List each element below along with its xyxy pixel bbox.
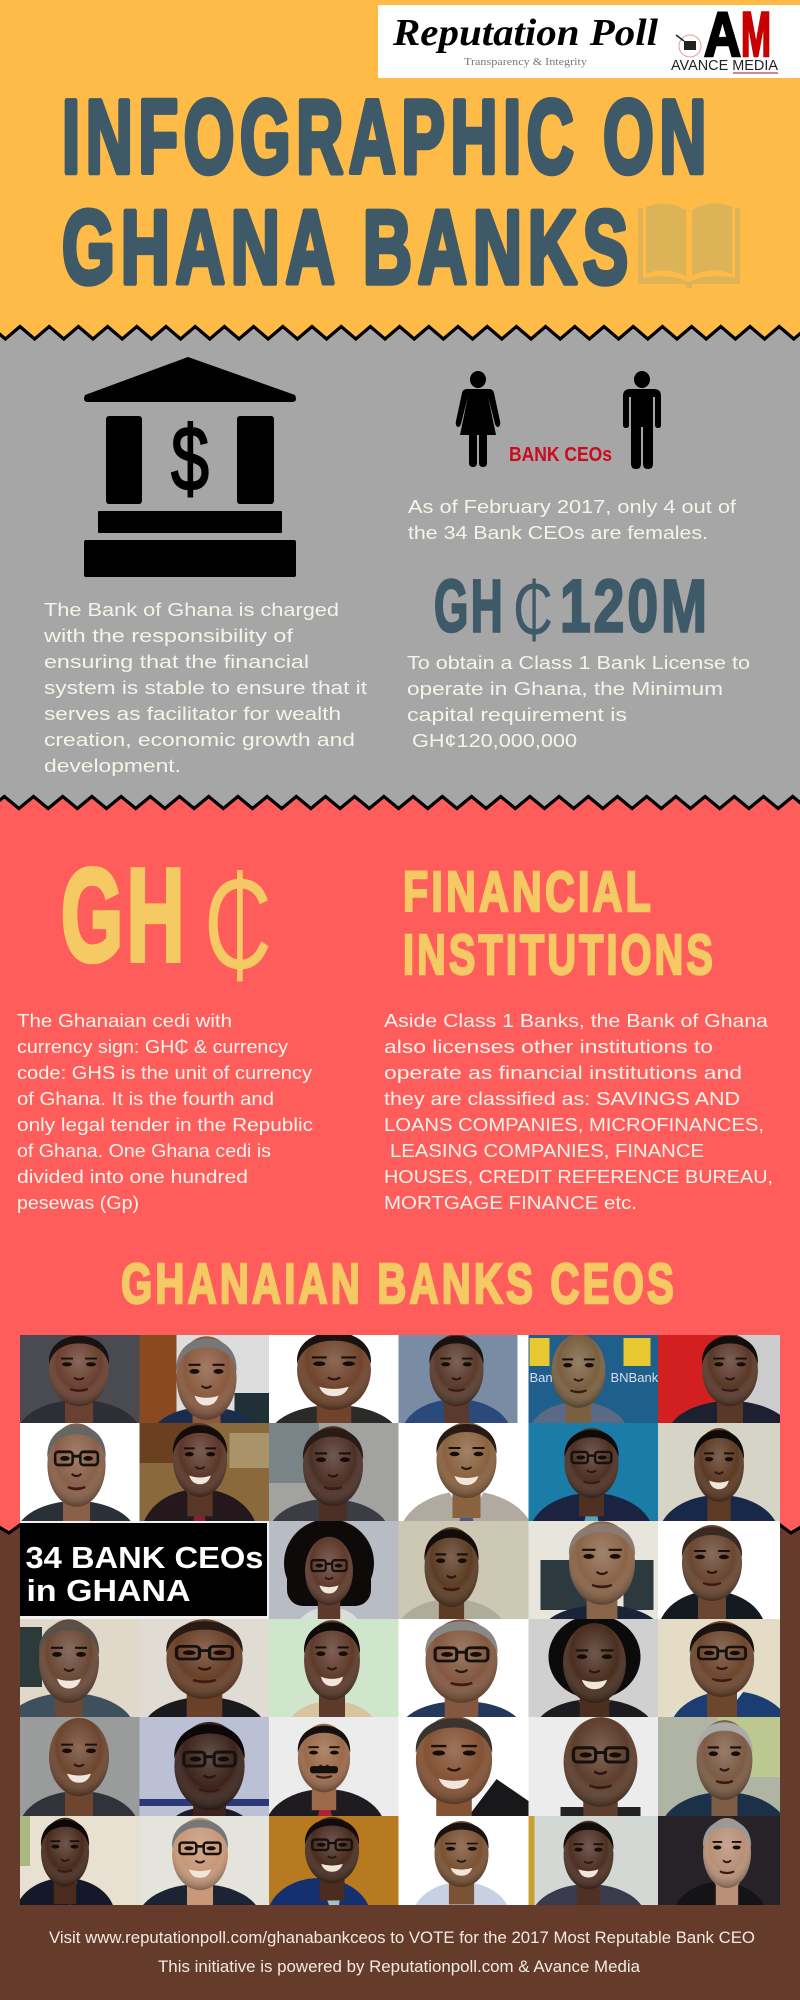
portrait 12 — [658, 1423, 780, 1521]
portrait 20 — [398, 1619, 528, 1717]
logo panel: Reputation Poll and Avance Media — [378, 0, 800, 78]
portrait 17 — [20, 1619, 140, 1717]
text: Ghanaian cedi description: divided into one hundred — [17, 1167, 248, 1187]
text: Bank of Ghana responsibility: system is stable to ensure that it — [44, 678, 367, 698]
heading: financial institutions — [403, 860, 716, 987]
portrait 28 — [658, 1717, 780, 1816]
portrait 32 — [398, 1816, 528, 1905]
text: Bank of Ghana responsibility — [43, 600, 367, 776]
text: other licensed institutions: HOUSES, CREDIT REFERENCE BUREAU, — [384, 1167, 773, 1187]
text: Ghanaian cedi description: only legal tender in the Republic — [17, 1115, 313, 1135]
portrait 25 — [269, 1717, 398, 1816]
text: Ghanaian cedi description: pesewas (Gp) — [17, 1193, 139, 1213]
portrait 7 — [20, 1423, 140, 1521]
footer text: initiative credit: This initiative is powered by Reputationpoll.com & Avance Media — [158, 1957, 641, 1976]
text: other licensed institutions: MORTGAGE FINANCE etc. — [384, 1193, 637, 1213]
logo tagline: Transparency & Integrity — [464, 56, 588, 68]
text: Ghanaian cedi description — [17, 1011, 313, 1213]
panel: brown photo and footer background — [0, 1522, 800, 2000]
icon: female figure — [456, 371, 500, 467]
logo: AM monogram: M — [741, 0, 771, 70]
text: female CEO statistic: As of February 2017, only 4 out of — [408, 497, 737, 517]
portrait 26 — [398, 1717, 528, 1816]
portrait 27 — [528, 1717, 658, 1816]
heading: GH₵ symbol: ₵ — [204, 853, 272, 996]
portrait 5: Ban — [530, 1370, 553, 1385]
portrait 29 — [20, 1816, 140, 1905]
portrait 4 — [398, 1335, 518, 1423]
portrait 6 — [658, 1335, 780, 1423]
portrait 10 — [398, 1423, 528, 1521]
text: Ghanaian cedi description: of Ghana. One Ghana cedi is — [17, 1141, 271, 1161]
text: Ghanaian cedi description: code: GHS is the unit of currency — [17, 1063, 312, 1083]
portrait 1 — [20, 1335, 140, 1423]
label: BANK CEOs: BANK CEOs — [509, 444, 612, 466]
panel: grey bank facts background — [0, 326, 800, 810]
text: Ghanaian cedi description: The Ghanaian cedi with — [17, 1011, 232, 1031]
text: Class 1 licence requirement: GH¢120,000,000 — [412, 731, 577, 751]
text: female CEO statistic — [408, 497, 737, 543]
portrait 33 — [528, 1816, 658, 1905]
portrait 3 — [269, 1335, 398, 1423]
title tile: 34 BANK CEOs in GHANA: 34 BANK CEOs — [26, 1540, 264, 1575]
portrait 8 — [140, 1423, 269, 1521]
big number: GH₵120M: 120M — [560, 564, 710, 648]
icon: open book — [638, 203, 740, 288]
portrait 19 — [269, 1619, 398, 1717]
title tile: 34 BANK CEOs in GHANA — [20, 1521, 269, 1619]
text: Bank of Ghana responsibility: The Bank of Ghana is charged — [44, 600, 339, 620]
portrait 9 — [269, 1423, 398, 1521]
footer text: vote call to action: Visit www.reputationpoll.com/ghanabankceos to VOTE for the 2017 Most Reputable Bank CEO — [49, 1928, 755, 1947]
title — [62, 80, 712, 306]
strip: white gap beside portrait 4 — [518, 1335, 528, 1423]
portrait 14 — [398, 1521, 528, 1619]
text: other licensed institutions: LOANS COMPANIES, MICROFINANCES, — [384, 1115, 764, 1135]
portrait 18 — [140, 1619, 269, 1717]
photo grid: CEO portraits — [3, 1330, 792, 1958]
icon: bank building — [84, 357, 296, 577]
text: Class 1 licence requirement: To obtain a Class 1 Bank License to — [407, 653, 750, 673]
logo text: Avance Media: AVANCE MEDIA — [671, 57, 778, 74]
text: Class 1 licence requirement: capital requirement is — [407, 705, 627, 725]
icon: camera badge — [676, 35, 701, 57]
text: other licensed institutions: Aside Class 1 Banks, the Bank of Ghana — [384, 1011, 769, 1031]
portrait 24 — [140, 1717, 269, 1816]
heading: financial institutions: FINANCIAL — [403, 860, 654, 924]
text: Class 1 licence requirement — [407, 653, 750, 751]
text: Bank of Ghana responsibility: creation, economic growth and — [44, 730, 355, 750]
text: other licensed institutions — [384, 1011, 773, 1213]
portrait 16 — [658, 1521, 780, 1619]
portrait 5 — [528, 1335, 659, 1423]
logo: AM monogram — [704, 0, 771, 70]
heading: GH₵ symbol: GH — [61, 842, 188, 988]
text: Ghanaian cedi description: of Ghana. It is the fourth and — [17, 1089, 274, 1109]
text: Bank of Ghana responsibility: ensuring that the financial — [44, 652, 309, 672]
text: Bank of Ghana responsibility: development. — [44, 756, 181, 776]
big number: GH₵120M: ₵ — [513, 570, 553, 650]
logo text: Reputation Poll: Reputation Poll — [392, 12, 658, 54]
portrait 23 — [20, 1717, 140, 1816]
panel: orange header background — [0, 0, 800, 345]
portrait 22 — [658, 1619, 780, 1717]
portrait 34 — [658, 1816, 780, 1905]
portrait 11 — [528, 1423, 658, 1521]
portrait 30 — [140, 1816, 269, 1905]
big number: GH₵120M: GH — [434, 564, 505, 648]
text: other licensed institutions: they are classified as: SAVINGS AND — [384, 1089, 740, 1109]
text: Class 1 licence requirement: operate in Ghana, the Minimum — [407, 679, 723, 699]
text: Ghanaian cedi description: currency sign: GH₵ & currency — [17, 1037, 288, 1057]
big number: GH₵120M — [434, 564, 710, 650]
portrait 15 — [528, 1521, 658, 1619]
icon: male figure — [623, 371, 661, 469]
text: Bank of Ghana responsibility: with the responsibility of — [43, 626, 294, 646]
text: Bank of Ghana responsibility: serves as facilitator for wealth — [44, 704, 341, 724]
portrait 31 — [269, 1816, 398, 1905]
portrait 2 — [140, 1335, 269, 1423]
portrait 21 — [528, 1619, 658, 1717]
text: other licensed institutions: also licenses other institutions to — [384, 1037, 713, 1057]
panel: red currency and institutions background — [0, 796, 800, 1540]
text: other licensed institutions: operate as financial institutions and — [384, 1063, 742, 1083]
text: female CEO statistic: the 34 Bank CEOs are females. — [408, 523, 708, 543]
title tile: 34 BANK CEOs in GHANA: in GHANA — [26, 1573, 190, 1608]
icon: bank building: $ — [171, 408, 209, 510]
portrait 13 — [269, 1521, 398, 1619]
portrait 5: BNBank — [610, 1370, 659, 1385]
logo: AM monogram: A — [704, 0, 741, 70]
text: other licensed institutions: LEASING COMPANIES, FINANCE — [390, 1141, 704, 1161]
